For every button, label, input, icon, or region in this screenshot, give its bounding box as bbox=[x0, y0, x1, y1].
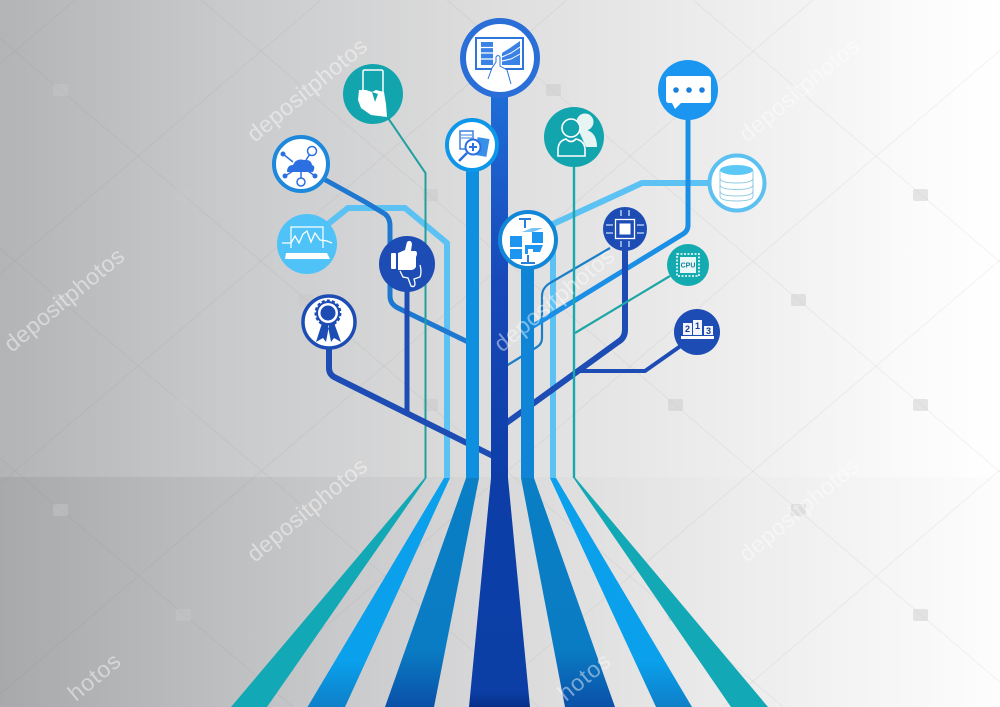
circuit line: chat to cube stem bbox=[530, 118, 688, 328]
circuit line: podium branch bbox=[580, 345, 682, 371]
circuit line: thin blue from chip bbox=[506, 248, 610, 366]
circuit line: cpu branch bbox=[575, 276, 670, 333]
icon: award badge bbox=[303, 296, 355, 348]
icon: database bbox=[710, 156, 764, 210]
icon: cubes bbox=[500, 212, 556, 268]
circuit line: light blue from database bbox=[553, 183, 710, 478]
circuit line: teal from users bbox=[573, 160, 575, 478]
icon: document search bbox=[447, 120, 497, 170]
icon: smartphone in hand bbox=[343, 64, 403, 124]
icon: laptop chart bbox=[277, 214, 337, 274]
icon: touch report panel bbox=[463, 21, 537, 95]
circuit line: main trunk bbox=[491, 90, 508, 478]
icon: users bbox=[544, 107, 604, 167]
floor stripes bbox=[231, 478, 768, 707]
watermark camera marks bbox=[53, 84, 928, 621]
circuit line: blue from cloud bbox=[322, 178, 468, 342]
icon: cpu bbox=[667, 244, 709, 286]
icon: cloud network bbox=[274, 137, 328, 191]
icon: podium: 1 bbox=[695, 321, 700, 331]
circuit line: light blue from laptop bbox=[328, 208, 447, 478]
icon: chat bubble bbox=[658, 60, 718, 120]
background wall bbox=[0, 0, 1000, 478]
watermark text: depositphotos bbox=[242, 452, 372, 567]
watermark text: hotos bbox=[63, 648, 125, 706]
watermark text: depositphotos bbox=[0, 242, 129, 357]
watermark text: depositphotos bbox=[734, 32, 864, 147]
watermark text: hotos bbox=[553, 648, 615, 706]
icon: microchip bbox=[603, 207, 647, 251]
icon: podium: 2 bbox=[685, 324, 690, 334]
watermark text: depositphotos bbox=[489, 242, 619, 357]
circuit line: document stem bbox=[466, 165, 479, 478]
background floor bbox=[0, 477, 1000, 707]
icon: podium: 3 bbox=[706, 326, 711, 336]
circuit line: badge to trunk bbox=[329, 345, 493, 456]
icon: cpu: CPU bbox=[681, 262, 695, 270]
icon: podium bbox=[674, 309, 720, 355]
circuit line: thumb stem bbox=[404, 285, 410, 413]
circuit line: teal from phone bbox=[388, 118, 426, 478]
circuit line: cube stem bbox=[521, 265, 534, 478]
circuit line: chip to trunk bbox=[505, 245, 625, 424]
watermark text: depositphotos bbox=[242, 32, 372, 147]
icon: thumbs up and down bbox=[379, 236, 435, 292]
watermark text: depositphotos bbox=[734, 452, 864, 567]
